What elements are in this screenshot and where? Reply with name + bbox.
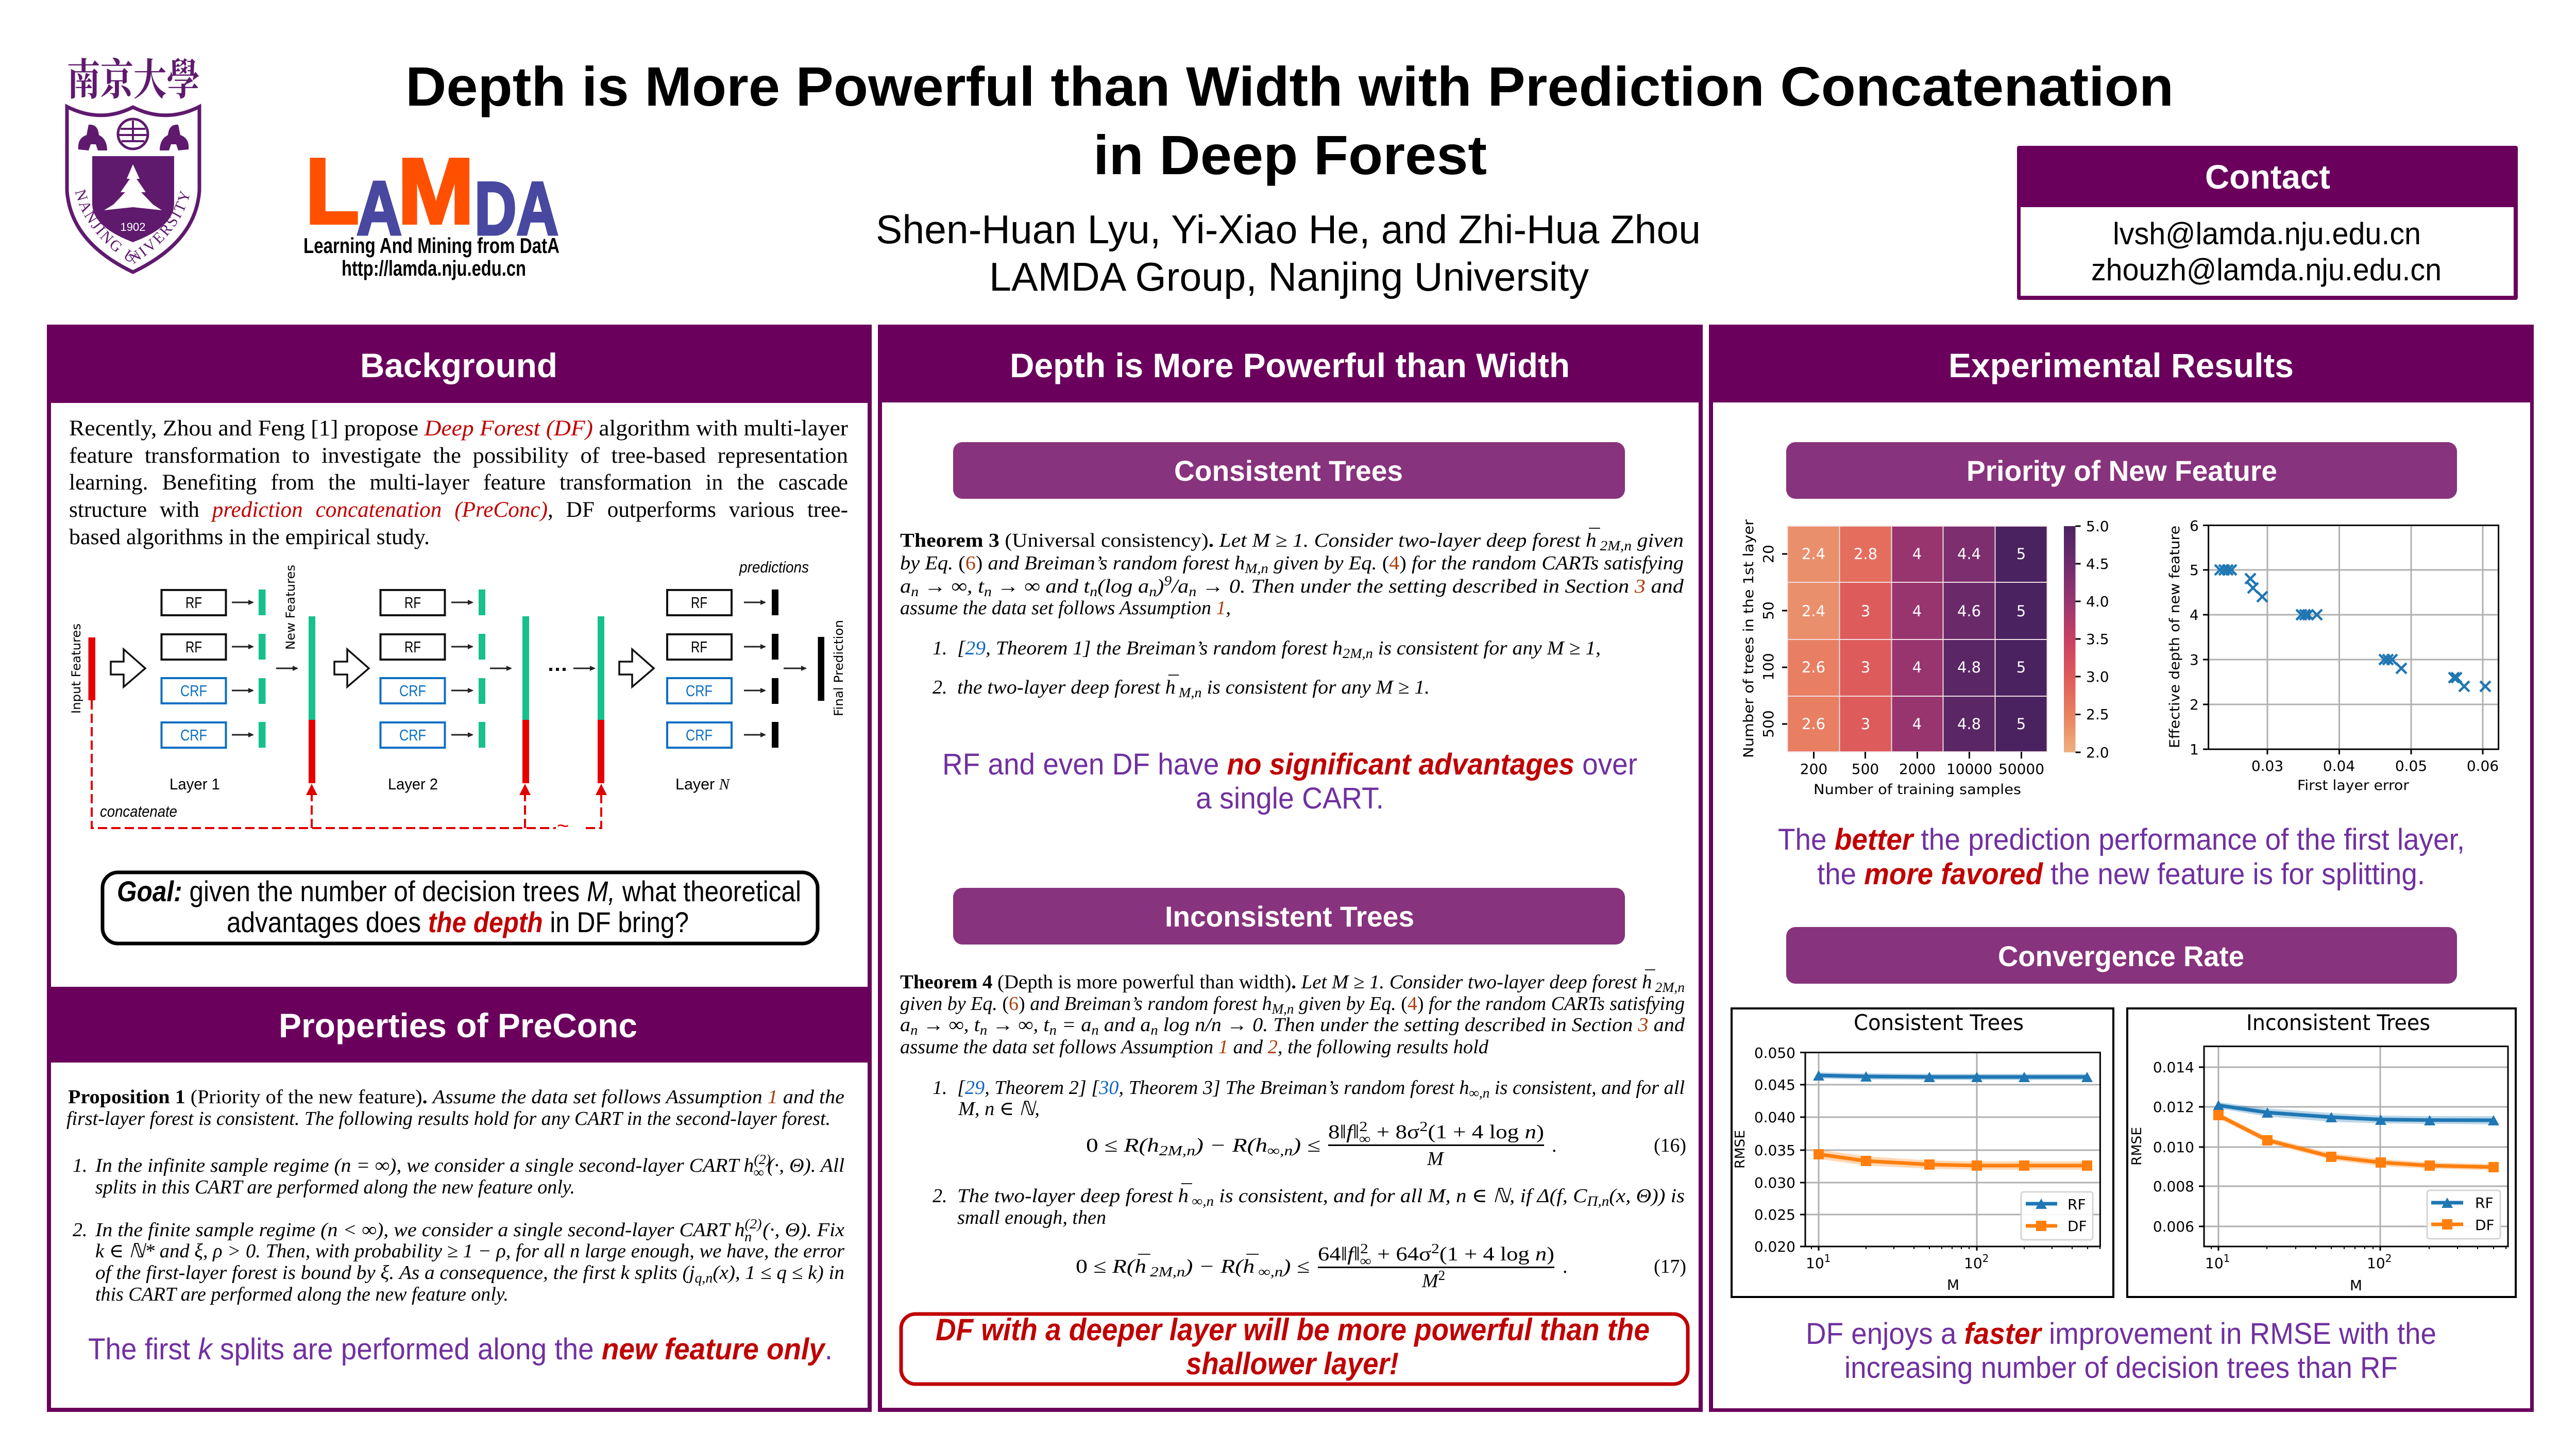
diagram: deep forest cascade: concatenate (100, 802, 177, 820)
chart: heatmap of new feature depth: 5 (2016, 659, 2026, 676)
diagram: deep forest cascade: RF (185, 638, 202, 656)
panel: contact: lvsh@lamda.nju.edu.cn (2113, 216, 2421, 251)
subheader: Convergence Rate: Convergence Rate (1998, 940, 2244, 972)
logo: Nanjing University crest (65, 45, 201, 274)
text block: proposition 1: In the finite sample regime (n < ∞), we consider a single second-layer CART h (95, 1219, 713, 1241)
chart: RMSE convergence, consistent trees: RF (2067, 1196, 2086, 1213)
takeaway: no significant advantages: RF and even DF have no significant advantages over (942, 748, 1637, 781)
text block: proposition 1: 1. (73, 1155, 88, 1176)
diagram: deep forest cascade: Layer 2 (388, 775, 438, 793)
chart: RMSE convergence, consistent trees: 0.020 (1754, 1238, 1795, 1255)
diagram: deep forest cascade: Layer N (675, 775, 731, 793)
diagram: deep forest cascade: predictions (739, 558, 809, 576)
heading: Experimental Results: Experimental Results (1948, 346, 2294, 384)
panel: depth is more powerful than width (878, 325, 1703, 1412)
subheader: Inconsistent Trees (953, 888, 1625, 945)
title: Depth is More Powerful than Width with Prediction Concatenation (405, 55, 2174, 117)
chart: heatmap of new feature depth: 2.0 (2086, 744, 2109, 761)
text block: theorem 4: ∞,n (1192, 1193, 1214, 1209)
chart: RMSE convergence, inconsistent trees: 0.006 (2153, 1218, 2194, 1235)
subheader: Consistent Trees (953, 442, 1625, 499)
chart: heatmap of new feature depth: 20 (1760, 545, 1777, 563)
chart: heatmap of new feature depth: 100 (1760, 653, 1777, 681)
chart: heatmap of new feature depth: 4.8 (1957, 659, 1981, 676)
title (405, 55, 2174, 186)
text block: proposition 1 (66, 1086, 844, 1305)
diagram: deep forest cascade: CRF (180, 726, 207, 744)
chart: RMSE convergence, consistent trees: M (1947, 1276, 1959, 1293)
text block: theorem 4: The two-layer deep forest h (957, 1185, 1172, 1207)
equation 16: 2M,n (1159, 1143, 1195, 1158)
equation 17: . (1563, 1256, 1567, 1277)
chart: scatter of effective depth vs first layer error: 6 (2190, 517, 2199, 534)
text block: theorem 3: (log a (1097, 576, 1149, 597)
diagram: deep forest cascade: CRF (686, 682, 713, 700)
callout: deeper layer: shallower layer! (1186, 1346, 1399, 1381)
text block: theorem 3: 9 (1164, 573, 1172, 588)
text block: theorem 3: /a (1171, 576, 1189, 597)
chart: RMSE convergence, consistent trees: 0.035 (1754, 1142, 1795, 1159)
logo: LAMDA: L (306, 140, 359, 243)
diagram: deep forest cascade: Layer 1 (170, 775, 220, 793)
chart: heatmap of new feature depth: 2000 (1899, 761, 1936, 778)
title: in Deep Forest (1093, 124, 1487, 186)
diagram: deep forest cascade: CRF (399, 726, 426, 744)
text block: proposition 1: this CART are performed along the new feature only. (95, 1284, 509, 1305)
diagram: deep forest cascade: CRF (399, 682, 426, 700)
text block: theorem 4: log n/n → 0. Then under the setting described in Section 3 and (1163, 1014, 1683, 1036)
chart: RMSE convergence, inconsistent trees: 10 (2367, 1255, 2385, 1272)
chart: RMSE convergence, inconsistent trees: M (2350, 1277, 2362, 1294)
chart: RMSE convergence, consistent trees: RMSE (1733, 1130, 1748, 1169)
text block: theorem 3: n (1090, 584, 1097, 599)
text block: theorem 4: [29, Theorem 2] [30, Theorem 3] The Breiman’s random forest h (957, 1077, 1466, 1099)
chart: heatmap of new feature depth: 3 (1861, 715, 1870, 733)
chart: heatmap of new feature depth: 3 (1861, 602, 1870, 620)
chart: heatmap of new feature depth: 4.0 (2086, 593, 2109, 610)
text block: background paragraph: Recently, Zhou and Feng [1] propose Deep Forest (DF) algorithm with multi-layer (69, 416, 848, 441)
text block: theorem 3: the two-layer deep forest h (957, 677, 1166, 698)
text block: theorem 4: n (1150, 1022, 1158, 1038)
equation 17: (1 + 4 log (1439, 1243, 1535, 1265)
chart: heatmap of new feature depth: 500 (1760, 710, 1777, 738)
text block: theorem 3: given by Eq. (4) for the random CARTs satisfying (1273, 552, 1667, 574)
text block: theorem 4: Π,n (1586, 1193, 1609, 1209)
equation 16: + 8σ (1371, 1121, 1419, 1143)
logo: LAMDA: M (398, 140, 474, 243)
equation 17: ) − R(h (1184, 1256, 1255, 1277)
equation 17: 2 (1431, 1241, 1439, 1256)
chart: heatmap of new feature depth: 3.0 (2086, 668, 2109, 685)
text block: theorem 3: 2M,n (1343, 646, 1373, 661)
chart: RMSE convergence, consistent trees: Consistent Trees (1854, 1010, 2024, 1035)
chart: RMSE convergence, inconsistent trees: DF (2475, 1217, 2495, 1234)
diagram: deep forest cascade: RF (691, 638, 707, 656)
text block: theorem 4: → ∞, t (987, 1014, 1050, 1036)
text block: proposition 1: q,n (694, 1270, 713, 1286)
diagram: deep forest cascade: RF (404, 638, 421, 656)
chart: RMSE convergence, consistent trees: 1 (1824, 1252, 1831, 1265)
text block: theorem 3: n (1149, 584, 1157, 599)
chart: heatmap of new feature depth: 4.5 (2086, 555, 2109, 572)
chart: scatter of effective depth vs first layer error (2167, 517, 2499, 794)
equation 16: ) ≤ (1292, 1135, 1320, 1156)
equation 17: ∞ (1360, 1253, 1371, 1269)
text block: theorem 3: M,n (1244, 561, 1268, 576)
text block: theorem 4: n (1091, 1022, 1099, 1038)
logo: LAMDA: http://lamda.nju.edu.cn (342, 256, 526, 280)
callout: goal: advantages does the depth in DF bring? (227, 906, 689, 938)
equation 16: 2 (1359, 1119, 1367, 1134)
panel: experimental results (1709, 325, 2534, 1412)
text block: theorem 4: M,n (1272, 1001, 1294, 1017)
text block: theorem 3: → ∞, t (919, 576, 985, 597)
chart: heatmap of new feature depth: 10000 (1946, 761, 1992, 778)
chart: RMSE convergence, consistent trees: 10 (1964, 1255, 1982, 1272)
logo: LAMDA (303, 140, 560, 280)
text block: proposition 1: (x), 1 ≤ q ≤ k) in (713, 1262, 844, 1284)
diagram: deep forest cascade: Final Prediction (832, 620, 846, 716)
chart: RMSE convergence, inconsistent trees: 2 (2385, 1252, 2392, 1265)
chart: heatmap of new feature depth: 2.6 (1802, 715, 1825, 733)
logo: Nanjing University crest: 南京大學 (67, 45, 200, 108)
text block: proposition 1: k ∈ ℕ* and ξ, ρ > 0. Then, with probability ≥ 1 − ρ, for all n large enough, we have, the error (95, 1240, 844, 1262)
equation 17: n) (1535, 1243, 1553, 1265)
text block: theorem 4: given by Eq. (6) and Breiman’s random forest h (900, 993, 1272, 1015)
text block: proposition 1: of the first-layer forest is bound by ξ. As a consequence, the first k splits (j (95, 1262, 675, 1284)
equation 16: 0 ≤ R(h (1086, 1135, 1152, 1156)
text block: proposition 1: In the infinite sample regime (n = ∞), we consider a single second-layer CART h (95, 1155, 727, 1176)
chart: heatmap of new feature depth: 5.0 (2086, 518, 2109, 535)
chart: RMSE convergence, inconsistent trees: 0.010 (2153, 1139, 2194, 1156)
takeaway: faster improvement (1806, 1317, 2436, 1385)
text block: theorem 4: and a (1099, 1014, 1150, 1036)
text block: theorem 4: Theorem 4 (Depth is more powerful than width) . Let M ≥ 1. Consider two-layer deep forest h (900, 971, 1645, 993)
takeaway: better prediction: the more favored the new feature is for splitting. (1817, 857, 2425, 891)
text block: theorem 4: is consistent, and for all M, n ∈ ℕ, if Δ(f, C (1214, 1185, 1587, 1207)
text block: theorem 3: M,n (1178, 685, 1201, 700)
text block: theorem 3: → 0. Then under the setting described in Section 3 and (1201, 576, 1680, 597)
subheader: Inconsistent Trees: Inconsistent Trees (1165, 900, 1414, 933)
text block: theorem 4: assume the data set follows Assumption 1 and 2, the following results hold (900, 1036, 1489, 1058)
chart: heatmap of new feature depth: 2.4 (1802, 602, 1825, 620)
chart: scatter of effective depth vs first layer error: Effective depth of new feature (2167, 526, 2183, 748)
chart: heatmap of new feature depth: 500 (1852, 761, 1879, 778)
diagram: deep forest cascade: RF (691, 594, 707, 612)
text block: proposition 1: splits in this CART are performed along the new feature only. (95, 1176, 575, 1198)
equation 16 (1086, 1119, 1686, 1170)
logo: Nanjing University crest: 1902 (121, 221, 145, 233)
text block: theorem 4: given by Eq. (4) for the random CARTs satisfying (1299, 993, 1685, 1015)
callout: goal: Goal: given the number of decision trees M, what theoretical (117, 875, 801, 907)
equation 17: 2 (1438, 1268, 1445, 1283)
chart: heatmap of new feature depth: 200 (1800, 761, 1827, 778)
panel: background and properties of PreConc (47, 325, 872, 1412)
diagram: deep forest cascade: New Features (283, 565, 298, 650)
authors and affiliation (876, 207, 1701, 299)
equation 16: ) − R(h (1194, 1135, 1267, 1156)
chart: heatmap of new feature depth: 5 (2016, 715, 2026, 733)
chart: RMSE convergence, inconsistent trees: 10 (2205, 1255, 2224, 1272)
equation 16: (1 + 4 log (1428, 1121, 1524, 1143)
text block: proposition 1: (2) (745, 1216, 762, 1232)
text block: theorem 4: n (1049, 1022, 1057, 1038)
diagram: deep forest cascade: ~ (557, 815, 569, 837)
chart: heatmap of new feature depth: 4.4 (1957, 545, 1981, 563)
chart: scatter of effective depth vs first layer error: 0.03 (2251, 757, 2283, 774)
text block: theorem 3: 2M,n (1600, 538, 1632, 553)
equation 17: ¯ (1245, 1252, 1259, 1273)
equation 17: 0 ≤ R(h (1076, 1256, 1141, 1277)
heading: Background: Background (360, 346, 557, 384)
chart: heatmap of new feature depth: Number of training samples (1814, 782, 2021, 798)
text block: theorem 4 (900, 967, 1686, 1292)
text block: theorem 3: → ∞ and t (992, 576, 1091, 597)
text block: proposition 1: (2) (754, 1152, 771, 1167)
takeaway: first k splits: The first k splits are performed along the new feature only. (88, 1333, 833, 1366)
equation 17: + 64σ (1371, 1243, 1431, 1265)
chart: heatmap of new feature depth: 3 (1861, 659, 1870, 676)
chart: scatter of effective depth vs first layer error: 0.04 (2323, 757, 2355, 774)
chart: RMSE convergence, consistent trees: 0.025 (1754, 1206, 1795, 1223)
text block: theorem 3: n (1189, 584, 1196, 599)
diagram: deep forest cascade: RF (404, 594, 421, 612)
chart: heatmap of new feature depth: 2.5 (2086, 706, 2109, 723)
equation 16: . (1552, 1135, 1557, 1156)
logo: LAMDA: Learning And Mining from DatA (303, 233, 560, 258)
subheader: Priority of New Feature (1786, 442, 2457, 499)
equation 16: 8‖f‖ (1328, 1121, 1358, 1143)
equation 16: 2 (1419, 1119, 1428, 1134)
chart: scatter of effective depth vs first layer error: 0.06 (2467, 757, 2499, 774)
diagram: deep forest cascade: CRF (180, 682, 207, 700)
text block: background paragraph: learning. Benefiting from the multi-layer feature transformation in the cascade (69, 470, 848, 495)
chart: RMSE convergence, consistent trees: 0.050 (1754, 1044, 1795, 1062)
callout: deeper layer: DF with a deeper layer will be more powerful than the (936, 1312, 1650, 1347)
chart: scatter of effective depth vs first layer error: First layer error (2297, 778, 2410, 794)
equation 16: M (1427, 1148, 1445, 1170)
text block: theorem 4: (x, Θ)) is (1609, 1185, 1685, 1207)
chart: RMSE convergence, inconsistent trees (2127, 1008, 2516, 1297)
chart: RMSE convergence, consistent trees: 10 (1806, 1255, 1824, 1272)
text block: theorem 4: ¯ (1643, 967, 1656, 989)
chart: heatmap of new feature depth: 4.6 (1957, 602, 1981, 620)
text block: theorem 3: assume the data set follows Assumption 1, (900, 597, 1231, 619)
chart: heatmap of new feature depth: 50 (1760, 601, 1777, 620)
chart: RMSE convergence, inconsistent trees: 0.012 (2153, 1099, 2194, 1116)
subheader: Consistent Trees: Consistent Trees (1174, 454, 1403, 487)
text block: theorem 3: [29, Theorem 1] the Breiman’s random forest h (957, 637, 1328, 659)
text block: theorem 4: a (900, 1014, 910, 1036)
text block: proposition 1: n (744, 1229, 752, 1244)
chart: heatmap of new feature depth: Number of trees in the 1st layer (1741, 519, 1757, 758)
text block: theorem 4: 1. (933, 1077, 947, 1099)
equation 16: ∞ (1359, 1131, 1371, 1147)
text block: theorem 3: ¯ (1167, 672, 1179, 694)
diagram: deep forest cascade (69, 558, 846, 837)
chart: heatmap of new feature depth: 50000 (1998, 761, 2044, 778)
chart: scatter of effective depth vs first layer error: 1 (2190, 741, 2199, 758)
text block: proposition 1: Proposition 1 (Priority of the new feature) . Assume the data set follows Assumption 1 and the (68, 1086, 844, 1108)
chart: heatmap of new feature depth: 2.4 (1802, 545, 1825, 563)
text block: theorem 4: n (980, 1022, 987, 1038)
chart: RMSE convergence, consistent trees: DF (2067, 1218, 2087, 1235)
text block: theorem 3: n (911, 584, 919, 599)
chart: scatter of effective depth vs first layer error: 2 (2190, 696, 2199, 713)
equation 16: (16) (1654, 1135, 1686, 1156)
equation 16: ∞,n (1267, 1143, 1293, 1158)
chart: heatmap of new feature depth: 4 (1912, 659, 1922, 676)
chart: RMSE convergence, inconsistent trees: RMSE (2129, 1127, 2145, 1166)
text block: background paragraph (69, 416, 848, 549)
chart: heatmap of new feature depth: 2.6 (1802, 659, 1825, 676)
equation 16: n) (1524, 1121, 1543, 1143)
text block: theorem 4: 2M,n (1655, 980, 1685, 995)
text block: theorem 3: Theorem 3 (Universal consistency) . Let M ≥ 1. Consider two-layer deep forest h (900, 530, 1563, 551)
callout: deeper layer (901, 1312, 1688, 1384)
takeaway: faster improvement: DF enjoys a faster improvement in RMSE with the (1806, 1317, 2436, 1351)
chart: heatmap of new feature depth: 4.8 (1957, 715, 1981, 733)
text block: theorem 3: ) (1156, 576, 1164, 597)
panel: contact: Contact (2205, 158, 2330, 196)
text block: theorem 4: 2. (933, 1185, 947, 1207)
chart: RMSE convergence, consistent trees: 0.040 (1754, 1109, 1795, 1126)
authors and affiliation: Shen-Huan Lyu, Yi-Xiao He, and Zhi-Hua Zhou (876, 207, 1701, 252)
text block: theorem 3: given (1632, 530, 1684, 551)
chart: scatter of effective depth vs first layer error: 0.05 (2395, 757, 2427, 774)
chart: RMSE convergence, consistent trees: 2 (1982, 1252, 1989, 1265)
chart: RMSE convergence, consistent trees (1732, 1008, 2113, 1297)
text block: proposition 1: ∞ (754, 1165, 764, 1180)
heading: Depth is More Powerful than Width: Depth is More Powerful than Width (1010, 346, 1570, 384)
text block: theorem 3: is consistent for any M ≥ 1. (1201, 677, 1430, 698)
chart: heatmap of new feature depth: 5 (2016, 545, 2026, 563)
text block: theorem 4: → ∞, t (918, 1014, 980, 1036)
chart: RMSE convergence, inconsistent trees: 0.008 (2153, 1178, 2194, 1195)
chart: scatter of effective depth vs first layer error: 3 (2190, 651, 2199, 668)
text block: theorem 3 (900, 526, 1684, 700)
subheader: Priority of New Feature: Priority of New Feature (1967, 454, 2277, 487)
text block: theorem 3: n (984, 584, 992, 599)
text block: background paragraph: feature transformation to investigate the possibility of tree-based representation (69, 444, 848, 468)
text block: proposition 1: (·, Θ). Fix (762, 1219, 844, 1241)
text block: theorem 4: = a (1057, 1014, 1091, 1036)
text block: theorem 4: small enough, then (957, 1207, 1106, 1228)
equation 17: (17) (1654, 1256, 1686, 1277)
chart: scatter of effective depth vs first layer error: 5 (2190, 562, 2199, 579)
chart: RMSE convergence, consistent trees: 0.030 (1754, 1174, 1795, 1191)
logo: LAMDA: A (357, 166, 402, 251)
chart: heatmap of new feature depth: 4 (1912, 602, 1922, 620)
text block: proposition 1: (·, Θ). All (767, 1155, 844, 1176)
text block: theorem 3: ¯ (1587, 526, 1600, 547)
authors and affiliation: LAMDA Group, Nanjing University (989, 254, 1589, 299)
logo: Nanjing University crest: NANJING UNIVERSITY (75, 189, 190, 264)
diagram: deep forest cascade: RF (185, 594, 202, 612)
chart: heatmap of new feature depth: 2.8 (1854, 545, 1877, 563)
equation 17: M (1422, 1270, 1438, 1292)
chart: RMSE convergence, consistent trees: 0.045 (1754, 1076, 1795, 1093)
text block: background paragraph: structure with prediction concatenation (PreConc), DF outperforms various tree- (69, 498, 848, 522)
diagram: deep forest cascade: CRF (686, 726, 713, 744)
equation 17: 2M,n (1150, 1264, 1185, 1279)
takeaway: faster improvement: increasing number of decision trees than RF (1844, 1351, 2398, 1385)
equation 17: ) ≤ (1282, 1256, 1310, 1277)
chart: heatmap of new feature depth (1741, 518, 2109, 798)
equation 17: ∞,n (1259, 1264, 1283, 1279)
text block: proposition 1: first-layer forest is consistent. The following results hold for any CART in the second-layer forest. (66, 1108, 831, 1130)
chart: heatmap of new feature depth: 4 (1912, 715, 1922, 733)
takeaway: no significant advantages: a single CART. (1196, 782, 1384, 815)
text block: proposition 1: 2. (73, 1219, 88, 1241)
callout: goal (103, 872, 818, 943)
chart: RMSE convergence, inconsistent trees: RF (2475, 1194, 2494, 1211)
text block: theorem 4: n (910, 1022, 918, 1038)
text block: theorem 3: a (900, 576, 910, 597)
diagram: deep forest cascade: Input Features (69, 624, 83, 714)
text block: theorem 4: M, n ∈ ℕ, (958, 1098, 1040, 1120)
equation 17: 2 (1360, 1241, 1368, 1256)
subheader: Convergence Rate (1786, 927, 2457, 984)
takeaway: no significant advantages (942, 748, 1637, 815)
logo: LAMDA: DA (474, 166, 558, 250)
text block: theorem 3: is consistent for any M ≥ 1, (1373, 637, 1601, 659)
chart: RMSE convergence, inconsistent trees: 0.014 (2153, 1059, 2194, 1076)
chart: RMSE convergence, inconsistent trees: Inconsistent Trees (2246, 1010, 2430, 1035)
panel: contact (2017, 146, 2518, 300)
text block: theorem 3: 2. (933, 677, 947, 698)
equation 17: ¯ (1137, 1252, 1151, 1273)
equation 17 (1076, 1241, 1686, 1292)
chart: heatmap of new feature depth: 5 (2016, 602, 2026, 620)
text block: theorem 3: 1. (933, 637, 947, 659)
takeaway: better prediction: The better the prediction performance of the first layer, (1778, 823, 2465, 856)
chart: RMSE convergence, inconsistent trees: 1 (2224, 1252, 2230, 1265)
panel: contact: zhouzh@lamda.nju.edu.cn (2091, 252, 2442, 287)
takeaway: better prediction (1778, 823, 2465, 891)
heading: Properties of PreConc: Properties of PreConc (279, 1006, 637, 1044)
text block: theorem 4: ∞,n (1469, 1085, 1489, 1101)
chart: scatter of effective depth vs first layer error: 4 (2190, 606, 2199, 624)
text block: theorem 4: ¯ (1180, 1181, 1193, 1203)
chart: heatmap of new feature depth: 4 (1912, 545, 1922, 563)
text block: theorem 4: is consistent, and for all (1489, 1077, 1685, 1099)
equation 17: 64‖f‖ (1318, 1243, 1359, 1265)
text block: theorem 3: by Eq. (6) and Breiman’s random forest h (900, 552, 1229, 574)
chart: heatmap of new feature depth: 3.5 (2086, 631, 2109, 648)
text block: background paragraph: based algorithms in the empirical study. (69, 525, 430, 549)
